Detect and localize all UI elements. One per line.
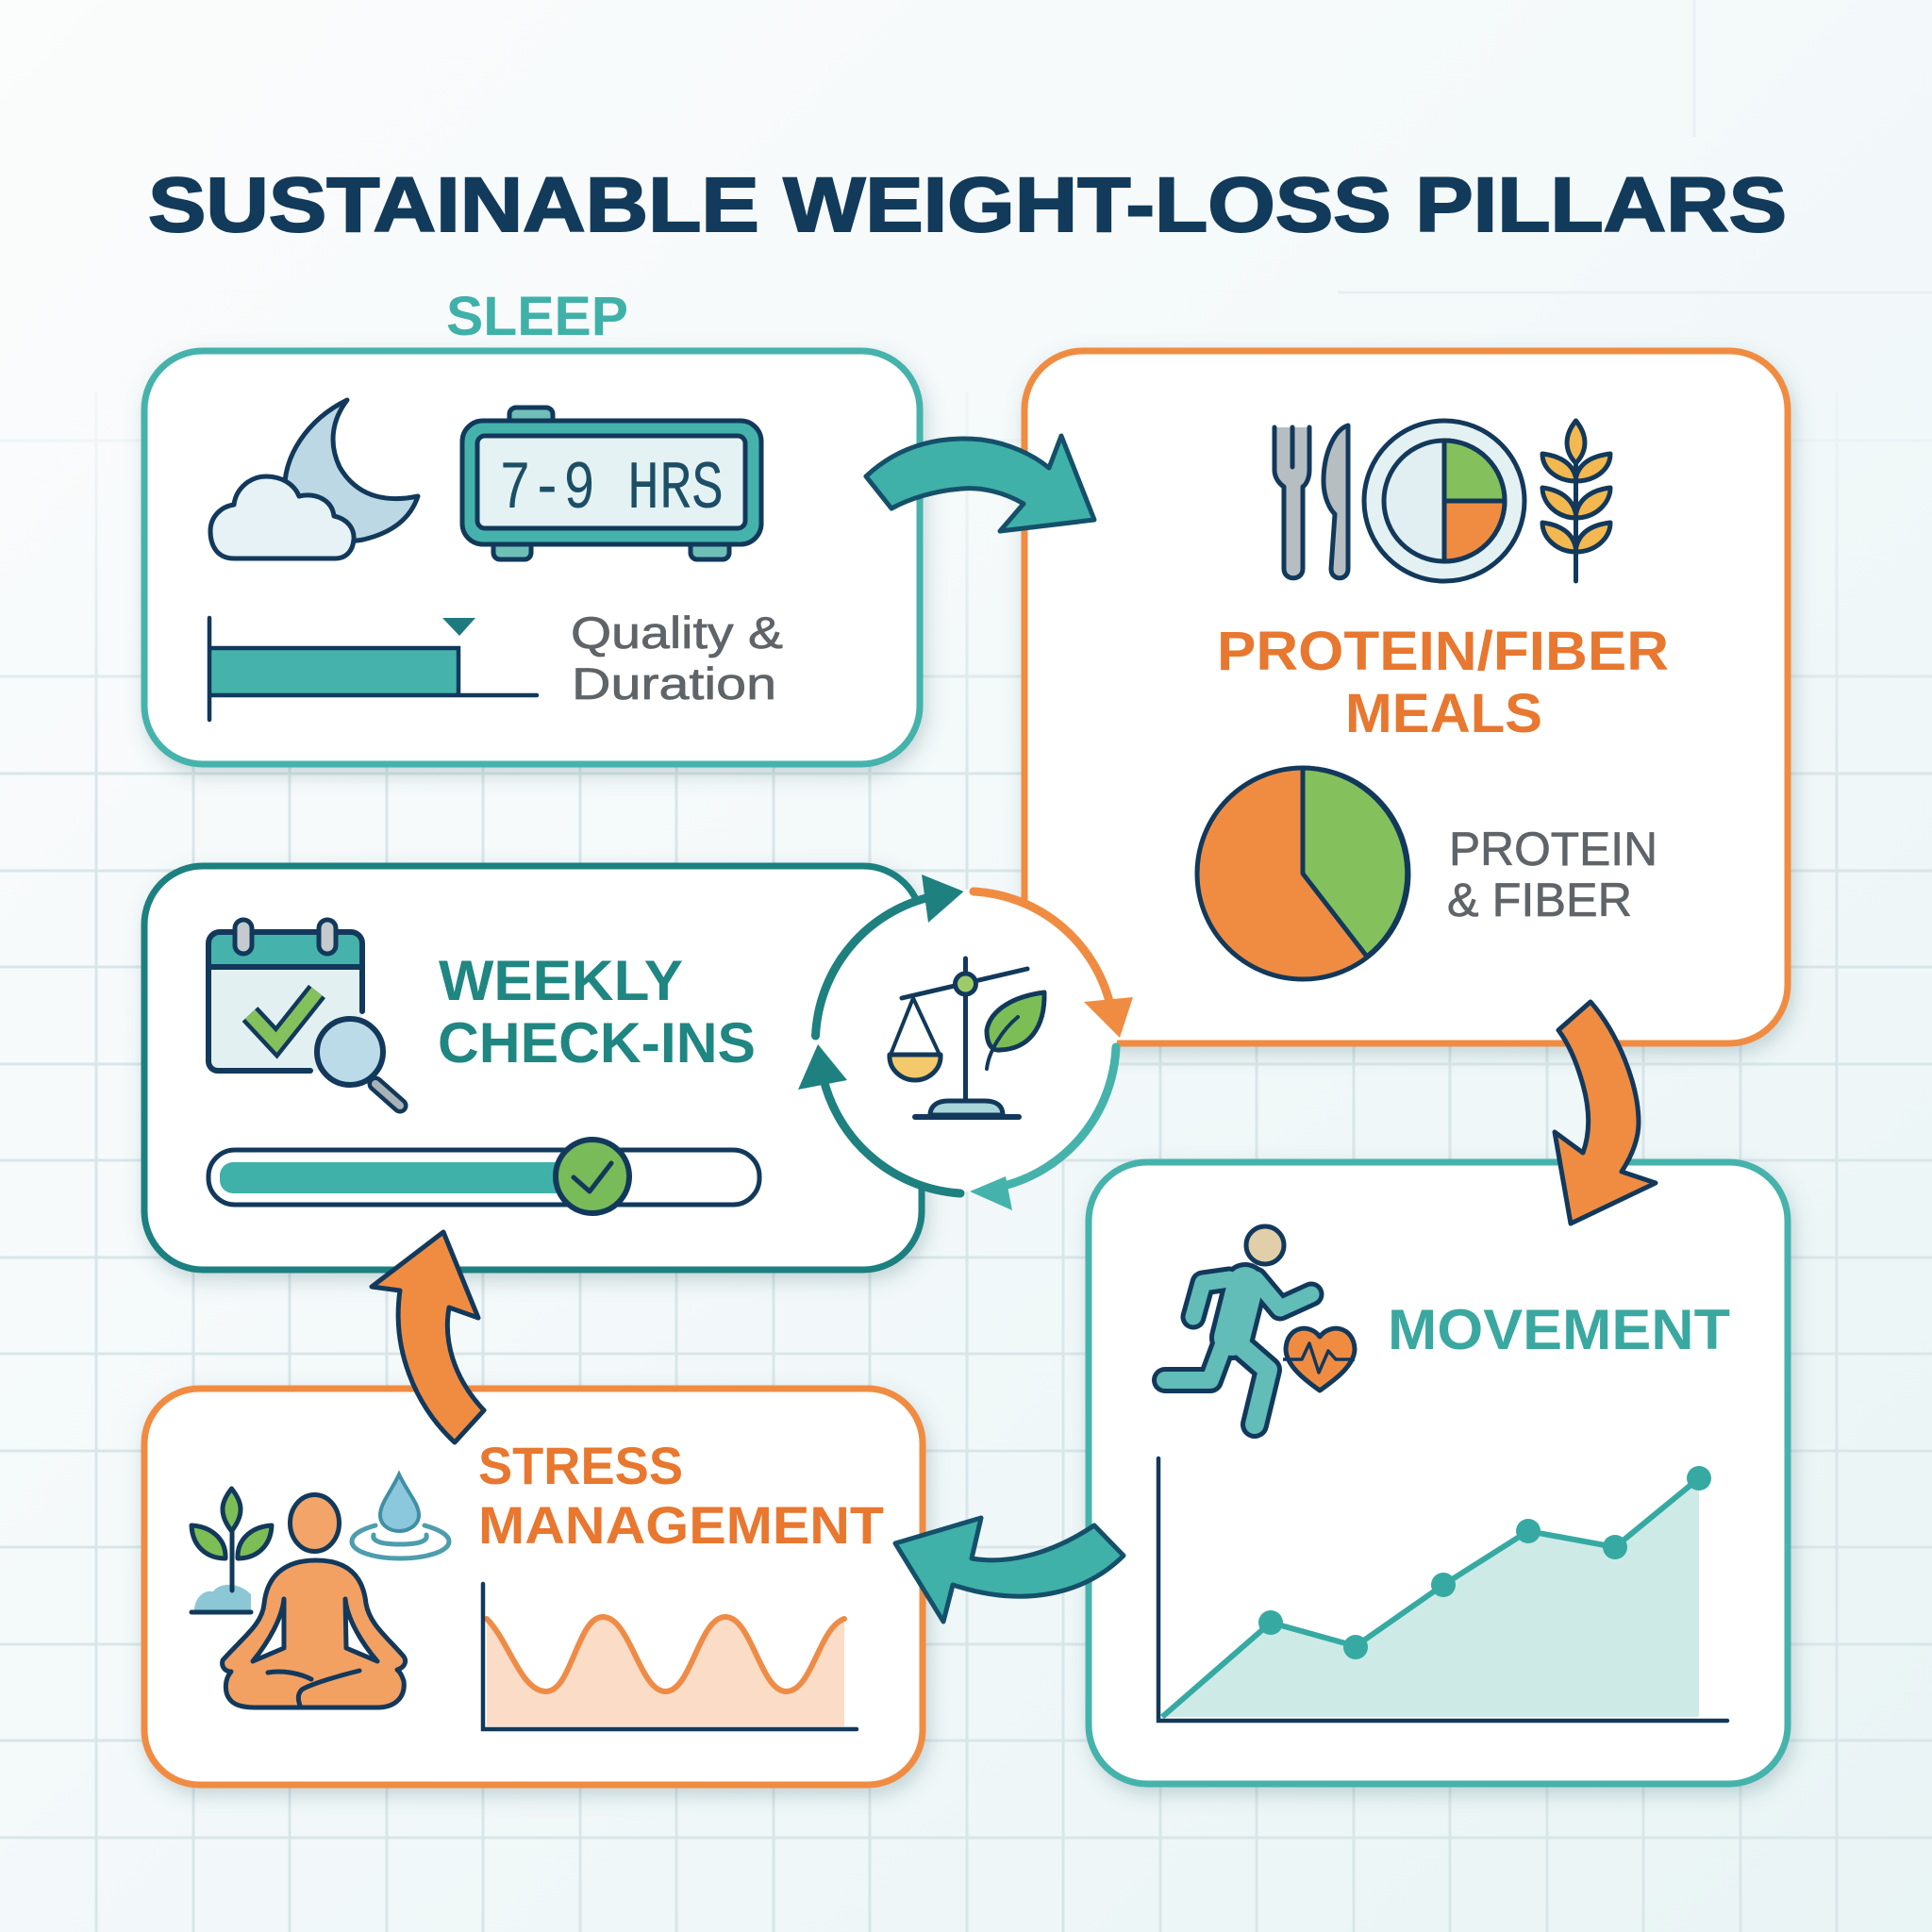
- panel: protein and fiber meals: [1024, 351, 1788, 1043]
- arrow: ring teal: [970, 1047, 1116, 1210]
- chart: protein and fiber pie: [1197, 768, 1408, 979]
- icon: wheat: [1542, 421, 1610, 581]
- arrow: ring orange: [974, 891, 1133, 1038]
- heading: weekly check-ins: CHECK-INS: [438, 1011, 756, 1074]
- icon: runner: [1165, 1226, 1311, 1424]
- heading: sleep: SLEEP: [446, 286, 628, 347]
- heading: stress management: STRESS: [478, 1436, 683, 1495]
- icon: balance scale with leaf: [890, 958, 1044, 1117]
- text: protein and fiber: & FIBER: [1447, 874, 1632, 926]
- panel: movement: [1089, 1162, 1788, 1784]
- panel: stress management: [144, 1389, 923, 1785]
- text: protein and fiber: PROTEIN: [1449, 823, 1657, 875]
- title: SUSTAINABLE WEIGHT-LOSS PILLARS: [148, 162, 1787, 248]
- icon: water drop with ripple: [352, 1474, 449, 1558]
- progress slider: [208, 1140, 759, 1213]
- heading: stress management: [478, 1436, 884, 1555]
- heading: protein/fiber meals: MEALS: [1345, 683, 1542, 744]
- icon: heart with pulse: [1283, 1328, 1355, 1391]
- heading: stress management: MANAGEMENT: [478, 1495, 884, 1555]
- arrow: protein to movement: [1555, 1002, 1656, 1224]
- icon: divided plate: [1364, 421, 1524, 581]
- heading: movement: MOVEMENT: [1388, 1298, 1730, 1361]
- chart: movement line: [1158, 1458, 1727, 1721]
- heading: protein/fiber meals: PROTEIN/FIBER: [1217, 621, 1669, 682]
- arrow: movement to stress: [895, 1518, 1124, 1622]
- heading: weekly check-ins: [438, 949, 756, 1074]
- arrow: stress to weekly: [372, 1232, 484, 1442]
- text: quality and duration: Quality &: [571, 608, 783, 658]
- text: protein and fiber: [1447, 823, 1657, 926]
- arrow: sleep to protein: [866, 436, 1094, 531]
- panel: sleep: [144, 351, 920, 764]
- heading: weekly check-ins: WEEKLY: [439, 949, 683, 1012]
- icon: calendar with check and magnifier: [208, 920, 400, 1106]
- icon: digital alarm clock: 7-9 HRS: [499, 451, 724, 528]
- heading: protein/fiber meals: [1217, 621, 1669, 744]
- panel: weekly check-ins: [144, 866, 922, 1270]
- chart: stress wave: [483, 1584, 857, 1729]
- center cycle ring: [798, 874, 1133, 1210]
- text: quality and duration: [571, 608, 783, 708]
- chart: sleep duration bar: [209, 618, 537, 720]
- icon: knife: [1324, 425, 1348, 578]
- text: quality and duration: Duration: [572, 658, 776, 708]
- arrow: ring dark teal lower: [798, 1044, 960, 1193]
- icon: plant: [192, 1489, 272, 1612]
- icon: fork: [1274, 427, 1309, 578]
- arrow: ring dark teal upper: [815, 874, 964, 1036]
- icon: moon and cloud: [210, 400, 418, 558]
- icon: digital alarm clock: [462, 408, 761, 559]
- icon: meditating person: [223, 1494, 406, 1707]
